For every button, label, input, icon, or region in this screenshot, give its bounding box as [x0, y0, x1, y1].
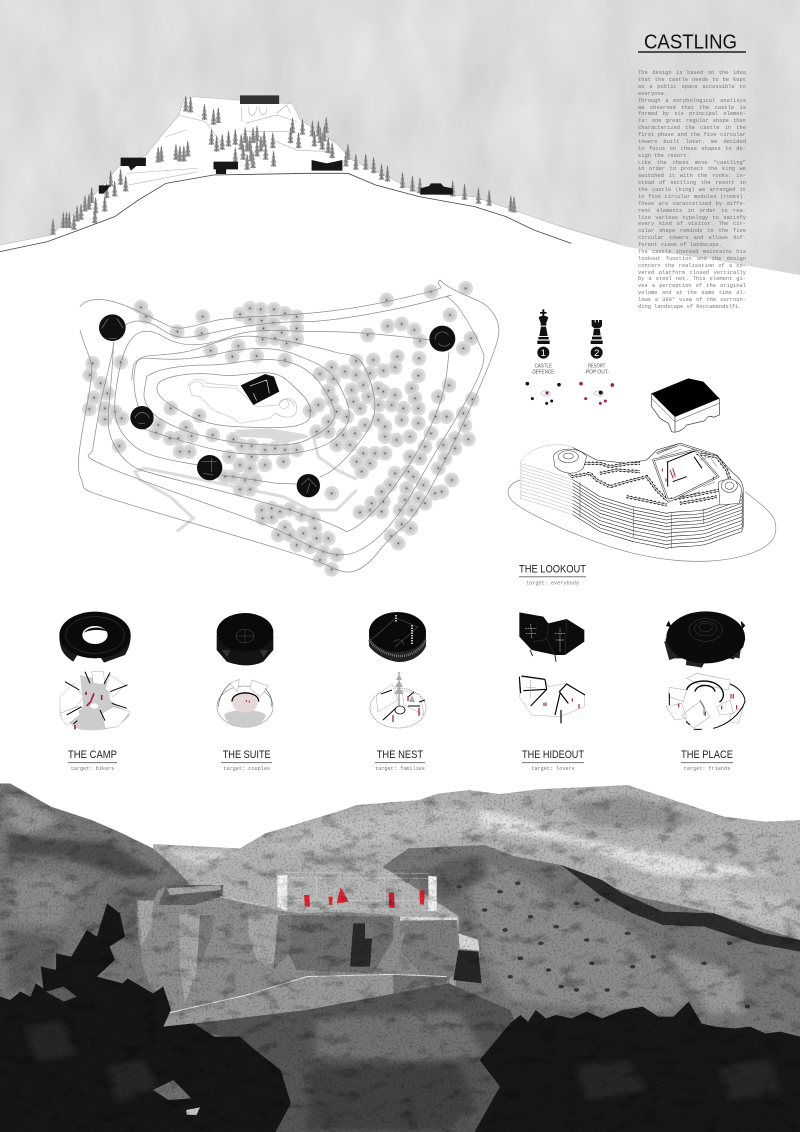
- conifer trees: [50, 96, 517, 235]
- caption castle defence: [531, 364, 556, 375]
- description text: as a public space accessible to: [638, 84, 746, 90]
- description text: The design is based on the idea: [638, 70, 746, 76]
- description text: everyone.: [638, 91, 667, 97]
- description text: ves a perception of the original: [638, 283, 746, 289]
- roof: [664, 611, 745, 668]
- label: the nest: THE NEST: [377, 749, 423, 761]
- icon: king: [537, 309, 550, 344]
- towers: [553, 449, 742, 505]
- description text: the castle (king) we arranged it: [638, 187, 746, 193]
- chess diagram: castle defence / resort pop out: [508, 309, 776, 561]
- description text: [638, 70, 746, 310]
- description text: stead of settling the resort in: [638, 180, 746, 186]
- ground line: [0, 173, 571, 252]
- castle walls and towers: [137, 885, 482, 1040]
- description text: vered platform closed vertically: [638, 270, 746, 276]
- hill upper outline: [0, 97, 620, 245]
- title: CASTLING: [644, 31, 737, 53]
- caption resort pop out: -POP OUT-: [584, 369, 609, 375]
- label: the place: [681, 749, 733, 772]
- number badge 1: [537, 347, 549, 359]
- description text: sign the resort.: [638, 153, 690, 159]
- number badge 2: 2: [594, 348, 599, 358]
- description text: These are caracterized by diffe-: [638, 201, 746, 207]
- caption resort pop out: [584, 364, 609, 375]
- lookout roof block: [652, 378, 719, 432]
- access road: [135, 437, 357, 532]
- label: the nest: target: families: [375, 766, 425, 772]
- label: the suite: THE SUITE: [223, 749, 271, 761]
- roof: [217, 613, 273, 665]
- rocky central mountain: [383, 845, 800, 1103]
- description text: lookout function and the design: [638, 256, 746, 262]
- caption castle defence: CASTLE: [535, 364, 552, 370]
- label: the camp: [68, 749, 117, 772]
- description text: concern the realisation of a co-: [638, 263, 746, 269]
- description text: switched it with the rooks: in-: [638, 173, 746, 179]
- label: the place: THE PLACE: [681, 749, 733, 761]
- floor plan: [60, 672, 130, 730]
- description text: in order to protect the king we: [638, 166, 746, 172]
- left mountain: [0, 783, 189, 1037]
- description text: The castle instead maintains his: [638, 249, 746, 255]
- stepped strata: [520, 443, 743, 548]
- hill interior lines: [127, 105, 328, 185]
- module: the place: [664, 611, 745, 731]
- label: the nest: [375, 749, 425, 772]
- description text: by a steel net. This element gi-: [638, 276, 746, 282]
- cutaway walls and figures: [667, 451, 702, 487]
- description text: cular shape reminds to the five: [638, 228, 746, 234]
- photo: castle in mountain landscape: [0, 783, 800, 1132]
- description text: circular towers and allows dif-: [638, 235, 746, 241]
- roof: [369, 612, 426, 662]
- the lookout roof on plan: [241, 374, 279, 405]
- floor plan with tree: [370, 672, 426, 728]
- description text: volume and at the same time al-: [638, 290, 746, 296]
- floor plan: [666, 673, 745, 731]
- crenellated walls on top: [557, 444, 730, 505]
- description text: first phase and the five circular: [638, 132, 746, 138]
- the lookout label: [519, 564, 586, 586]
- label: the suite: [221, 749, 272, 772]
- description text: Like the chess move "castling": [638, 160, 746, 166]
- caption castle defence: -DEFENCE-: [531, 369, 556, 375]
- number badge 1: 1: [541, 348, 546, 358]
- floor plan: [217, 679, 273, 727]
- label: the suite: target: couples: [223, 766, 270, 772]
- module: the camp: [59, 612, 131, 730]
- castle forecourt: [235, 428, 310, 444]
- description text: towers built later. We decided: [638, 139, 746, 145]
- dot diagram 1: [525, 382, 561, 405]
- description text: ding landscape of Roccamandolfi.: [638, 304, 742, 310]
- section modules (black buildings): [99, 95, 453, 195]
- roof: [519, 612, 584, 662]
- roof: [59, 612, 131, 663]
- dark forest foreground: [0, 903, 800, 1132]
- description text: in five circular modules (rooks).: [638, 194, 746, 200]
- description text: characterized the castle in the: [638, 125, 746, 131]
- label: the hideout: [522, 749, 584, 772]
- description text: ts: one great regular shape that: [638, 118, 746, 124]
- description text: to focus on these shapes to de-: [638, 146, 746, 152]
- description text: every kind of visitor. The cir-: [638, 221, 746, 227]
- description text: we observed that the castle is: [638, 105, 746, 111]
- rocks beneath the castle: [168, 983, 531, 1132]
- interior of cut-away hall: [658, 447, 717, 500]
- module: the nest: [369, 612, 426, 728]
- castle outline: [187, 379, 297, 423]
- label: the hideout: THE HIDEOUT: [522, 749, 584, 761]
- floor plan: [519, 676, 585, 723]
- base oval: [508, 480, 776, 561]
- description text: lows a 360° view of the surroun-: [638, 297, 746, 303]
- label: the hideout: target: lovers: [531, 766, 575, 772]
- site plan: [78, 280, 499, 572]
- caption resort pop out: RESORT: [588, 364, 606, 370]
- label: the camp: target: bikers: [71, 766, 114, 772]
- castle isometric model: [508, 443, 776, 561]
- dot diagram 2: [579, 382, 614, 405]
- label: the place: target: friends: [684, 766, 730, 772]
- contour lines: [78, 280, 499, 572]
- description text: that the castle needs to be kept: [638, 77, 746, 83]
- section drawing: hill with resort modules: [0, 95, 620, 252]
- trees: [89, 288, 472, 569]
- the lookout label: THE LOOKOUT: [519, 564, 586, 576]
- description text: rent elements in order to rea-: [638, 208, 746, 214]
- distant mountain range: [153, 785, 800, 1037]
- resort modules on plan (five black circles): [99, 314, 455, 497]
- module: the hideout: [519, 612, 585, 723]
- description text: formed by six principal elemen-: [638, 111, 746, 117]
- steel net platform with red figures: [277, 873, 437, 912]
- description text: lize various typology to satisfy: [638, 215, 746, 221]
- background: textured grey sky: [0, 0, 800, 290]
- description text: ferent views of landscape.: [638, 242, 722, 248]
- module: the suite: [217, 613, 273, 727]
- label: the camp: THE CAMP: [68, 749, 117, 761]
- description text: Through a morphological analisys: [638, 98, 746, 104]
- the lookout label: target: everybody: [526, 580, 579, 586]
- vertical wall breaks: [580, 482, 703, 548]
- number badge 2: [591, 347, 603, 359]
- icon: rook: [591, 320, 603, 344]
